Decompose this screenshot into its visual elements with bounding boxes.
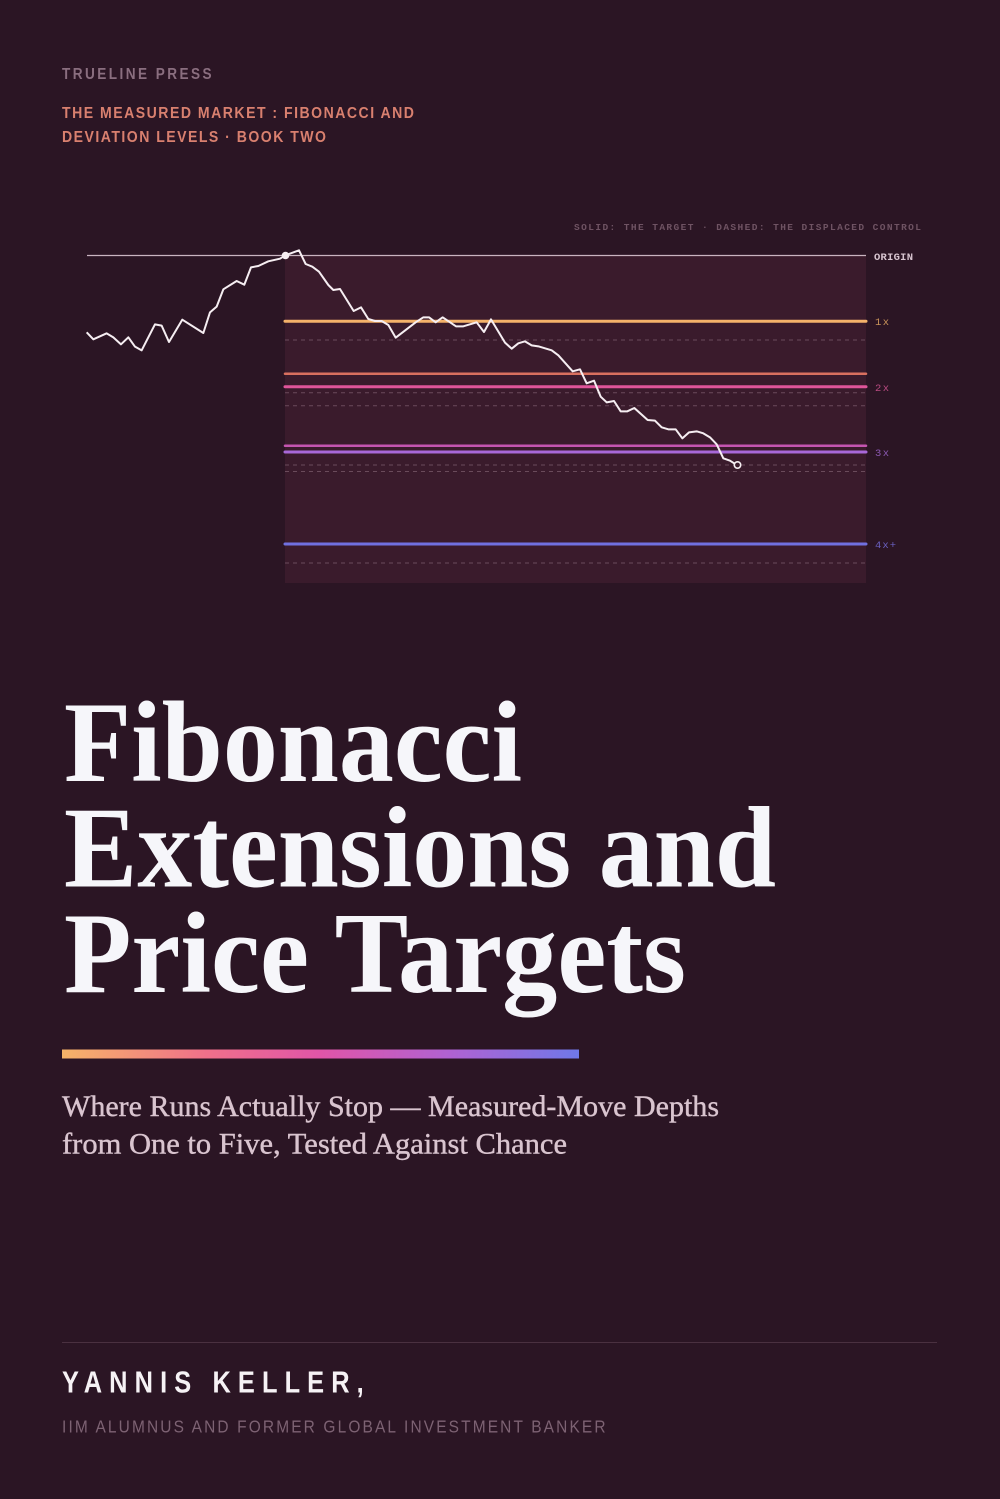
level labels: 1x xyxy=(875,317,889,329)
title: Price Targets xyxy=(64,890,686,1018)
footer divider xyxy=(62,1342,937,1344)
title: Fibonacci xyxy=(64,679,522,807)
end marker xyxy=(734,462,741,468)
series title xyxy=(62,104,414,146)
level labels: 2x xyxy=(875,383,889,395)
subtitle xyxy=(62,1090,719,1160)
subtitle: Where Runs Actually Stop — Measured-Move Depths xyxy=(62,1090,719,1123)
title xyxy=(64,679,776,1018)
series title: THE MEASURED MARKET : FIBONACCI AND xyxy=(62,104,414,122)
origin marker xyxy=(282,252,289,259)
title: Extensions and xyxy=(64,784,776,912)
level labels xyxy=(874,252,913,552)
origin line xyxy=(87,254,866,256)
series title: DEVIATION LEVELS · BOOK TWO xyxy=(62,128,326,146)
dashed control levels xyxy=(285,340,866,563)
subtitle: from One to Five, Tested Against Chance xyxy=(62,1128,567,1160)
measured-move zone panel xyxy=(285,256,866,583)
author name: YANNIS KELLER, xyxy=(62,1365,364,1400)
publisher name: TRUELINE PRESS xyxy=(62,66,212,83)
gradient rule xyxy=(62,1050,579,1058)
solid target levels xyxy=(285,321,866,544)
level labels: 4x+ xyxy=(875,540,896,552)
level labels: ORIGIN xyxy=(874,252,913,264)
chart: price path against target levels xyxy=(87,222,921,583)
chart legend: SOLID: THE TARGET · DASHED: THE DISPLACED CONTROL xyxy=(574,222,921,233)
level labels: 3x xyxy=(875,448,889,460)
author credentials: IIM ALUMNUS AND FORMER GLOBAL INVESTMENT BANKER xyxy=(62,1416,606,1437)
price line xyxy=(87,250,737,465)
